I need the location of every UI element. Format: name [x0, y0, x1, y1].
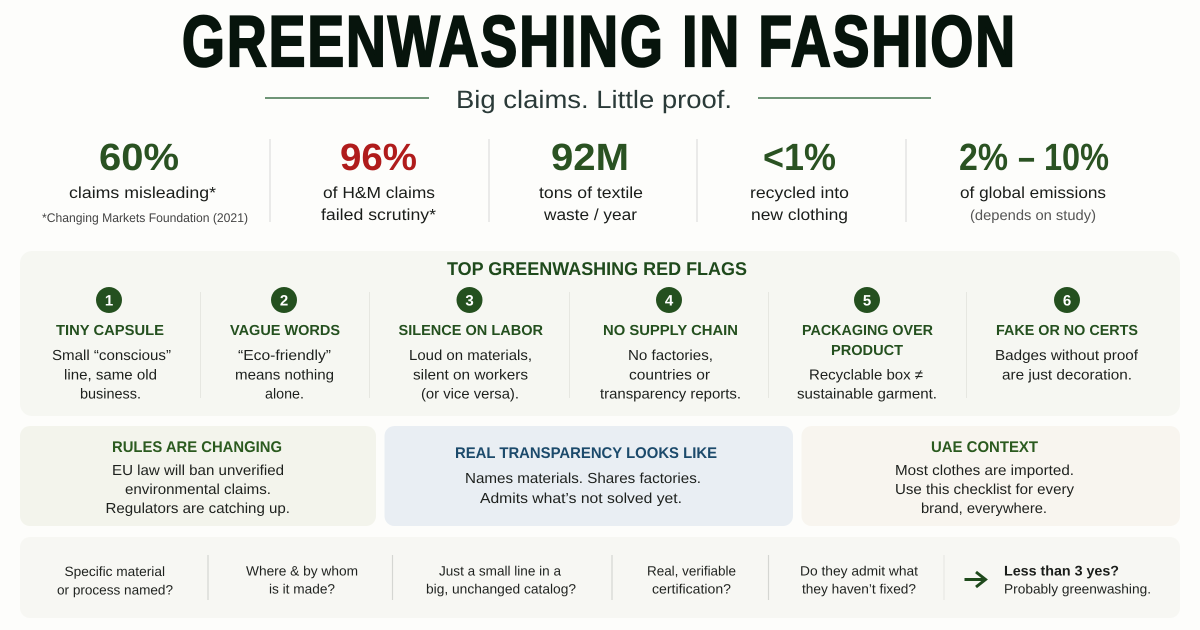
flag 6: fake or no certs: Badges without proof — [995, 348, 1139, 364]
flag 2: vague words: “Eco-friendly” — [238, 348, 331, 364]
panel: UAE context: Use this checklist for every — [895, 482, 1075, 498]
stat: 96% H&M claims — [321, 137, 436, 224]
flag 6: fake or no certs: 6 — [1063, 292, 1071, 310]
question: specific material: or process named? — [57, 582, 173, 598]
flag 6: fake or no certs — [995, 287, 1139, 384]
panel: top greenwashing red flags — [20, 251, 1180, 416]
flag 1: tiny capsule: business. — [80, 386, 141, 402]
verdict: Probably greenwashing. — [1004, 582, 1151, 596]
stat: 96% H&M claims: 96% — [340, 137, 417, 179]
panel: UAE context: brand, everywhere. — [921, 501, 1047, 517]
flag 5: packaging over product: 5 — [863, 292, 871, 310]
stat: 2% to 10% emissions: – — [1018, 137, 1035, 179]
question: admit unfixed: they haven’t fixed? — [802, 582, 916, 596]
flag 5: packaging over product: PRODUCT — [831, 343, 903, 359]
flag 4: no supply chain: 4 — [665, 292, 674, 310]
panel: rules are changing: environmental claims. — [125, 482, 271, 498]
flag 5: packaging over product: sustainable garment. — [797, 386, 937, 402]
question: certification — [647, 564, 736, 596]
question: where and by whom: Where & by whom — [246, 564, 358, 578]
panel: real transparency looks like — [384, 426, 793, 526]
panel: UAE context: UAE CONTEXT — [931, 439, 1039, 456]
flag 4: no supply chain: transparency reports. — [600, 386, 741, 402]
stat: 92M tons: 92M — [551, 137, 629, 179]
panel: UAE context — [802, 426, 1180, 526]
subtitle with rules: Big claims. Little proof. — [456, 86, 732, 114]
flag 2: vague words: means nothing — [235, 368, 334, 384]
stat: 2% to 10% emissions: (depends on study) — [970, 208, 1096, 224]
flag 5: packaging over product: PACKAGING OVER — [802, 323, 934, 339]
flag 2: vague words: 2 — [280, 292, 288, 310]
flag 5: packaging over product: Recyclable box ≠ — [809, 368, 923, 384]
stat: 60% claims misleading: claims misleading* — [69, 185, 216, 202]
flag 2: vague words — [230, 287, 340, 402]
flag 3: silence on labor: 3 — [465, 292, 474, 310]
flag 3: silence on labor — [398, 287, 544, 402]
stat: under 1% recycled: <1% — [763, 137, 836, 179]
question: small line: Just a small line in a — [439, 564, 561, 578]
verdict — [1004, 562, 1151, 596]
panel: real transparency looks like: REAL TRANSPARENCY LOOKS LIKE — [455, 445, 717, 462]
flag 4: no supply chain — [600, 287, 741, 402]
question: specific material: Specific material — [64, 564, 165, 579]
stat: 2% to 10% emissions: of global emissions — [960, 185, 1106, 202]
stat: 2% to 10% emissions: 10% — [1044, 137, 1109, 179]
flag 1: tiny capsule — [52, 287, 171, 402]
flag 3: silence on labor: Loud on materials, — [409, 348, 532, 364]
stat: 60% claims misleading: 60% — [99, 137, 179, 179]
flag 3: silence on labor: (or vice versa). — [421, 386, 519, 402]
flag 3: silence on labor: silent on workers — [413, 368, 528, 384]
stat: 60% claims misleading: *Changing Markets Foundation (2021) — [42, 211, 248, 225]
stat: under 1% recycled: new clothing — [751, 207, 848, 224]
flag 2: vague words: VAGUE WORDS — [230, 323, 340, 339]
panel: real transparency looks like: Names materials. Shares factories. — [465, 471, 701, 487]
flag 1: tiny capsule: 1 — [105, 292, 113, 310]
question: small line — [426, 564, 576, 596]
icon: arrow — [964, 572, 986, 587]
flag 1: tiny capsule: Small “conscious” — [52, 348, 171, 364]
stat: 2% to 10% emissions — [959, 137, 1109, 224]
flag 4: no supply chain: NO SUPPLY CHAIN — [603, 323, 738, 339]
flag 1: tiny capsule: TINY CAPSULE — [56, 323, 164, 339]
stat: under 1% recycled: recycled into — [750, 185, 849, 202]
flag 2: vague words: alone. — [265, 386, 304, 402]
panel heading: TOP GREENWASHING RED FLAGS — [447, 258, 747, 279]
question: admit unfixed — [800, 564, 918, 596]
verdict: Less than 3 yes? — [1004, 562, 1119, 578]
question: certification: Real, verifiable — [647, 564, 736, 578]
flag 6: fake or no certs: are just decoration. — [1002, 368, 1132, 384]
panel: rules are changing: Regulators are catching up. — [106, 501, 290, 517]
stat: 96% H&M claims: of H&M claims — [323, 185, 435, 202]
panel: rules are changing: EU law will ban unverified — [112, 463, 284, 479]
stat: 96% H&M claims: failed scrutiny* — [321, 207, 436, 224]
stats row — [42, 137, 1109, 225]
flag 1: tiny capsule: line, same old — [64, 368, 157, 384]
question: where and by whom — [246, 564, 358, 596]
question: specific material — [57, 564, 173, 598]
question: where and by whom: is it made? — [269, 582, 335, 596]
question: small line: big, unchanged catalog? — [426, 582, 576, 596]
panel: rules are changing: RULES ARE CHANGING — [112, 439, 282, 456]
stat: 92M tons: waste / year — [543, 207, 638, 224]
stat: 2% to 10% emissions: 2% — [959, 137, 1008, 179]
panel: rules are changing — [20, 426, 376, 526]
panel: checklist — [20, 537, 1180, 618]
flag 4: no supply chain: No factories, — [628, 348, 713, 364]
stat: under 1% recycled — [750, 137, 849, 224]
flag 3: silence on labor: SILENCE ON LABOR — [398, 323, 544, 339]
flag 6: fake or no certs: FAKE OR NO CERTS — [996, 323, 1138, 339]
flag 4: no supply chain: countries or — [629, 368, 710, 384]
question: admit unfixed: Do they admit what — [800, 564, 918, 578]
question: certification: certification? — [652, 582, 731, 596]
stat: 92M tons: tons of textile — [539, 185, 643, 202]
panel: UAE context: Most clothes are imported. — [895, 463, 1074, 479]
panel: real transparency looks like: Admits what’s not solved yet. — [480, 491, 682, 507]
flag 5: packaging over product — [797, 287, 937, 402]
stat: 92M tons — [539, 137, 643, 224]
stat: 60% claims misleading — [42, 137, 248, 225]
